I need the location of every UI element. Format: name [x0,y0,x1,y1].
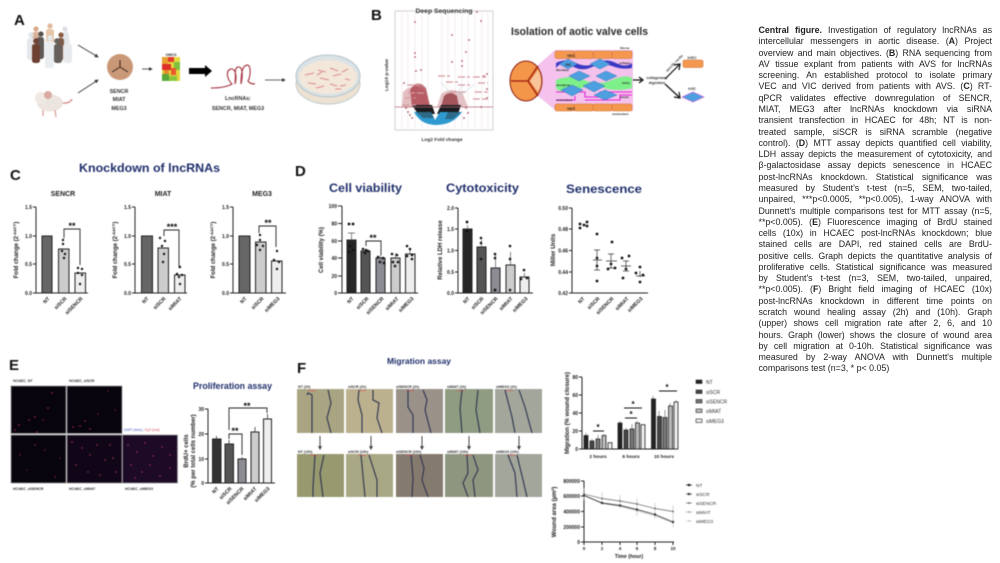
arrow: mouse to valve [78,80,98,93]
caption text block: positive cells. Graph depicts the quantitative analysis of [758,251,992,261]
text: collagenase digestion [646,76,668,85]
chart: wound area lines: 400000 [563,510,580,516]
chart: MIAT [111,191,187,312]
chart: senescence: Miller Units [551,233,557,266]
chart: cytotoxicity: Cytotoxicity [446,183,520,195]
chart: wound area lines: 2 [601,546,604,551]
micrograph: HCAEC_siMIAT: HCAEC_siMIAT [69,487,96,491]
chart: senescence: siMIAT [614,296,631,312]
chart: cell viability: siSENCR [365,296,386,316]
legend: migration bars: NT [706,380,713,386]
legend: migration bars [696,380,728,425]
caption text block: AV tissue explant from patients with AVS for lncRNAs [758,59,992,69]
chart: cytotoxicity: Relative LDH release [438,220,444,280]
legend: migration bars: siSENCR [706,400,728,406]
chart: MIAT: 1.0 [124,234,131,240]
chart: SENCR: 1.5 [25,205,32,211]
chart: MEG3: 0.0 [222,291,229,297]
x axis label: Log2 Fold change [421,137,463,143]
chart: SENCR: Fold change (2 [14,236,20,278]
chart: wound area lines: 6 [636,546,639,551]
brightfield images: 10h row [297,450,542,497]
chart: MIAT: siSCR [152,296,168,311]
micrograph: HCAEC_NT [11,379,66,434]
legend: wound area lines [686,483,717,525]
panel E: proliferation [9,357,275,506]
chart: MEG3: siMEG3 [264,296,281,314]
diagram: valve tissue layers: fibroblast [556,68,569,72]
chart: BrdU proliferation: siSCR [218,486,234,501]
chart: MEG3: 0.5 [222,262,229,268]
caption text block: proliferative cells. Statistical significance was measured [758,262,992,272]
chart: wound area lines: Wound area (µm²) [551,487,558,537]
chart title: Deep Sequencing [415,8,473,15]
chart: senescence: 0.42 [558,291,568,297]
legend: wound area lines: siSCR [696,492,710,498]
diagram: valve tissue layers: VEC [567,106,575,111]
VEC top row [555,51,632,58]
caption text block: treated sample, siSCR is siRNA scramble (negative [758,127,992,137]
micrograph: HCAEC_siSCR [67,379,122,434]
chart: MEG3: Fold change (2 [211,236,217,278]
chart: SENCR: siSCR [53,296,69,311]
diagram: valve tissue layers: spongiosa [556,83,570,87]
chart: MIAT: 0.0 [124,291,131,297]
arrow: thick black [189,65,212,77]
chart: SENCR: 1.0 [25,234,32,240]
chart: senescence: 0.50 [558,206,568,212]
chart: cytotoxicity: siSENCR [479,296,500,316]
chart: BrdU proliferation: ** [243,401,251,411]
legend: migration bars: siSCR [706,390,721,396]
chart: BrdU proliferation: 20 [198,432,204,438]
diagram: aortic valve cross section [510,50,555,110]
chart: MEG3: -ΔΔCT [209,223,214,236]
arrows: 2h to 10h [318,436,520,449]
caption text block: β-galactosidase assay depicts senescence in HCAEC [758,160,992,170]
panel label C: C [10,167,21,184]
icon: mouse [35,91,72,117]
caption text block: post-lncRNAs knockdown. Statistical significance was [758,172,992,182]
chart: migration bars: * [631,400,635,409]
caption text block: MIAT, MEG3 after lncRNAs knockdown via siRNA [758,104,992,114]
text: culture conditions: specific media [665,54,684,73]
chart: SENCR: -ΔΔCT [12,223,17,236]
chart: MIAT: 1.5 [124,205,131,211]
chart: wound area lines: 600000 [563,494,580,500]
chart: migration bars [565,372,728,460]
micrograph: HCAEC_siSENCR [11,435,66,491]
chart: SENCR [12,191,88,316]
chart: cell viability: siSCR [355,296,371,311]
arrow: to culture dish [265,79,285,81]
text: valve lncRNAs: SENCR [110,89,129,95]
caption text block: **p<0.005). (E) Fluorescence imaging of BrdU stained [758,217,992,227]
chart: MIAT: siMIAT [167,296,184,312]
icon: hVIC cell [682,87,704,102]
text: lncRNAs label: LncRNAs: [225,96,251,102]
chart: migration bars: 6 hours [622,454,640,460]
micrograph legend: DAPI (blue), Cy3 (red) [124,428,160,432]
caption text block: post-lncRNAs knockdown in different time points on [758,296,992,306]
chart: SENCR: 0.0 [25,291,32,297]
chart: wound area lines: 10 [670,546,676,551]
legend: wound area lines: siMIAT [696,510,711,516]
text: valve lncRNAs: MEG3 [111,106,127,112]
chart: wound area lines: 8 [654,546,657,551]
brightfield images: 10h row: siSENCR (10h) [396,450,422,454]
chart: cytotoxicity: 0.0 [447,291,454,297]
caption text block: measured by Student's t-test (n=5, SEM, two-tailed, [758,183,992,193]
chart: BrdU proliferation: NT [211,486,221,495]
text: valve lncRNAs: MIAT [113,97,126,103]
chart: wound area lines: 200000 [563,525,580,531]
chart: cytotoxicity: 1.0 [447,248,454,254]
micrograph: HCAEC_siSCR: HCAEC_siSCR [69,379,95,383]
chart: cell viability: 40 [331,256,337,262]
panel D: viability, cytotoxicity, senescence [295,163,648,316]
text: collagenase digestion: digestion [649,81,666,85]
heading: knockdown: Knockdown of lncRNAs [79,163,220,175]
chart: BrdU proliferation: siMEG3 [254,486,271,504]
chart: MIAT: Fold change (2 [113,236,119,278]
panel label F: F [297,360,306,377]
legend: wound area lines: NT [696,483,702,489]
chart: migration bars: * [665,383,669,392]
brightfield images: 2h row [297,385,542,433]
caption text block: by cell migration at 0-10h. Statistical significance was [758,341,992,351]
chart: wound area lines: 4 [619,546,622,551]
panel label D: D [295,163,306,180]
caption text block: Dunnett's multiple comparisons test for MTT assay (n=5, [758,206,992,216]
chart: MIAT: 0.5 [124,262,131,268]
brightfield images: 10h row: NT (10h) [298,450,313,454]
chart: cytotoxicity: NT [462,296,472,305]
micrograph: HCAEC_siMEG3: HCAEC_siMEG3 [125,487,153,491]
chart: migration bars: 0 [575,447,578,453]
icon: lncRNA strand [211,65,255,88]
arrow: tissue to digestion [633,77,643,83]
diagram: valve tissue layers [555,46,633,116]
chart: MIAT: MIAT [155,191,172,198]
chart: cytotoxicity: siSCR [470,296,486,311]
icon: aortic valve [107,54,133,80]
chart: migration bars: 80 [572,375,578,381]
chart: cell viability: Cell viability (%) [319,227,325,273]
chart: SENCR: NT [42,296,52,305]
chart: migration bars: 2 hours [589,454,607,460]
micrograph: HCAEC_NT: HCAEC_NT [13,379,33,383]
chart: cell viability: 0 [334,291,337,297]
chart: SENCR: ** [68,221,76,231]
VEC bottom row [555,104,632,111]
chart: MEG3 [209,191,286,314]
micrograph: HCAEC_siSENCR: HCAEC_siSENCR [13,487,44,491]
chart: cell viability: 80 [331,222,337,228]
caption text block: measured by 2-way ANOVA with Dunnett's multiple [758,352,992,362]
chart: MIAT: ) [113,222,119,224]
chart: MEG3: ** [264,218,272,228]
chart: cell viability: siMIAT [384,296,401,312]
chart: wound area lines: 0 [577,540,580,546]
diagram: valve tissue layers: collagen [619,61,631,65]
brightfield images: 2h row: siSCR (2h) [348,385,367,389]
caption text block: screening. An established protocol to isolate primary [758,70,992,80]
icon: omics heatmap: OMICS [165,53,177,57]
chart: senescence: Senescence [566,184,642,196]
caption text block: by Student's t-test (n=3, SEM, two-tailed, unpaired, [758,273,992,283]
chart: cell viability [319,183,418,316]
icon: petri dish [296,55,360,104]
diagram: valve tissue layers: VEC [567,53,575,58]
caption text block: unpaired, ***p<0.0005, **p<0.005), 1-way ANOVA with [758,194,992,204]
chart: wound area lines [551,479,717,560]
panel label A: A [14,12,25,29]
chart: cell viability: ** [369,233,377,243]
chart: MIAT: -ΔΔCT [111,223,116,236]
panel F: migration [297,357,728,560]
heading: proliferation assay: Proliferation assay [193,381,273,392]
chart: MIAT: *** [167,222,178,232]
icon: omics heatmap [162,53,180,81]
chart: BrdU proliferation: siMIAT [242,486,259,502]
chart: MIAT: NT [141,296,151,305]
chart: migration bars: Migration (% wound closure) [565,372,571,454]
chart: BrdU proliferation: ** [231,426,239,436]
chart: wound area lines: Time (hour) [615,554,643,560]
chart: BrdU proliferation: BrdU+ cells [184,434,190,468]
text: lncRNAs label [212,96,264,112]
diagram: valve tissue layers: VIC [565,62,572,67]
panel C: knockdown of lncRNAs [10,163,286,316]
arrow: to hVIC [665,84,680,98]
chart: cytotoxicity: siMEG3 [512,296,529,314]
text: lncRNAs label: SENCR, MIAT, MEG3 [212,106,264,112]
legend: migration bars: siMEG3 [706,419,724,425]
caption text block [758,25,992,373]
chart: senescence [551,184,648,316]
chart: migration bars: * [596,423,600,432]
caption text block: VEC and VIC derived from patients with AVS. (C) RT- [758,81,992,91]
chart: senescence: siSENCR [595,296,616,316]
chart: migration bars: 20 [572,429,578,435]
icon: hVEC cell: hVEC [687,56,697,60]
caption text block: cells (10x) in HCAEC post-lncRNAs knockdown; blue [758,228,992,238]
diagram: valve tissue layers: fibrosa [620,46,630,50]
chart: senescence: siMEG3 [627,296,644,314]
chart: BrdU proliferation: 30 [198,407,204,413]
arrow: to hVEC [665,64,680,79]
diagram: valve tissue layers: elastin [620,95,629,99]
caption text block: control). (D) MTT assay depicts quantified cell viability, [758,138,992,148]
chart: volcano plot [384,8,493,143]
chart: senescence: siSCR [586,296,602,311]
brightfield images: 10h row: siMEG3 (10h) [496,450,520,454]
chart: migration bars: 60 [572,393,578,399]
chart: migration bars: 10 hours [654,454,674,460]
text: collagenase digestion: collagenase [646,76,668,80]
chart: cell viability: siMEG3 [398,296,415,314]
caption text block: Central figure. Investigation of regulatory lncRNAs as [758,25,992,35]
chart: cytotoxicity: 0.5 [447,270,454,276]
chart: MEG3: siSCR [250,296,266,311]
text: valve lncRNAs [110,89,129,112]
chart: cytotoxicity: siMIAT [498,296,515,312]
chart: cell viability: 100 [329,204,337,210]
chart: MEG3: MEG3 [252,191,272,198]
diagram: valve tissue layers: GAGs [622,81,630,85]
chart: BrdU proliferation [184,401,275,506]
brightfield images: 2h row: siMEG3 (2h) [496,385,518,389]
brightfield images: 2h row: NT (2h) [298,385,311,389]
chart: senescence: 0.44 [558,270,568,276]
chart: SENCR: SENCR [51,191,75,198]
brightfield images: 2h row: siMIAT (2h) [447,385,467,389]
chart: cytotoxicity: 1.5 [447,227,454,233]
panel label B: B [371,7,382,24]
chart: senescence: NT [577,296,587,305]
caption text block: (upper) shows cell migration rate after 2, 6, and 10 [758,318,992,328]
icon: patient group [27,23,72,68]
icon: hVIC cell: hVIC [688,87,696,91]
caption text block: LDH assay depicts the measurement of cytotoxicity, and [758,149,992,159]
legend: wound area lines: siSENCR [696,501,717,507]
diagram: valve tissue layers: ventricularis [612,112,629,116]
arrow: valve to omics [142,68,152,70]
panel label E: E [9,357,19,374]
panel A: project overview [14,12,360,117]
chart: cell viability: 20 [331,274,337,280]
chart: cell viability: NT [346,296,356,305]
arrow: patients to valve [78,45,98,57]
chart: BrdU proliferation: (% per total cells number) [191,414,197,488]
chart: wound area lines: 800000 [563,479,580,485]
legend: wound area lines: siMEG3 [696,519,713,525]
panel B: RNA sequencing and cell isolation [371,7,704,143]
chart: cell viability: Cell viability [329,183,403,195]
caption text block: **p<0.005). (F) Bright field imaging of HCAEC (10x) [758,284,992,294]
brightfield images: 10h row: siMIAT (10h) [447,450,469,454]
micrograph: HCAEC_siMIAT [67,435,122,491]
caption text block: transient transfection in HCAEC for 48h; NT is non- [758,115,992,125]
caption text block: comparisons test (n=3, * p< 0.05) [758,363,889,373]
valve interstitial cells [559,59,617,100]
chart: MEG3: 1.0 [222,234,229,240]
chart: BrdU proliferation: 0 [201,481,204,487]
chart: MEG3: NT [239,296,249,305]
chart: MEG3: 1.5 [222,205,229,211]
caption text block: intercellular messengers in aortic disease. (A) Project [758,36,992,46]
chart: migration bars: 40 [572,411,578,417]
chart: MEG3: ) [211,222,217,224]
caption text block: hours. Graph (lower) shows the closure of wound area [758,330,992,340]
chart: BrdU proliferation: siSENCR [225,486,246,506]
heading: migration assay: Migration assay [387,357,452,366]
brightfield images: 2h row: siSENCR (2h) [396,385,420,389]
chart: wound area lines: 0 [583,546,586,551]
legend: migration bars: siMIAT [706,409,721,415]
chart: senescence: 0.48 [558,227,568,233]
chart: SENCR: 0.5 [25,262,32,268]
chart: BrdU proliferation: 10 [198,457,204,463]
diagram: valve tissue layers: ventricularis [556,98,573,102]
chart: cytotoxicity [438,183,533,316]
chart: SENCR: siSENCR [64,296,85,316]
chart: senescence: 0.46 [558,248,568,254]
brightfield images: 10h row: siSCR (10h) [348,450,369,454]
chart: cell viability: 60 [331,239,337,245]
y axis label: Log10 p-value [384,59,390,91]
caption text block: qPCR validates effective downregulation of SENCR, [758,93,992,103]
caption text block: scratch wound healing assay (2h) and (10h). Graph [758,307,992,317]
chart: migration bars: * [629,410,633,419]
chart: cytotoxicity: 2.0 [447,206,454,212]
caption text block: stained cells are DAPI, red stained cells are BrdU- [758,239,992,249]
heading: isolation of valve cells: Isolation of aotic valve cells [511,26,648,38]
icon: hVEC cell [683,56,703,68]
micrograph: HCAEC_siMEG3 [122,435,178,491]
chart: SENCR: ) [14,222,20,224]
caption text block: overview and main objectives. (B) RNA sequencing from [758,48,992,58]
